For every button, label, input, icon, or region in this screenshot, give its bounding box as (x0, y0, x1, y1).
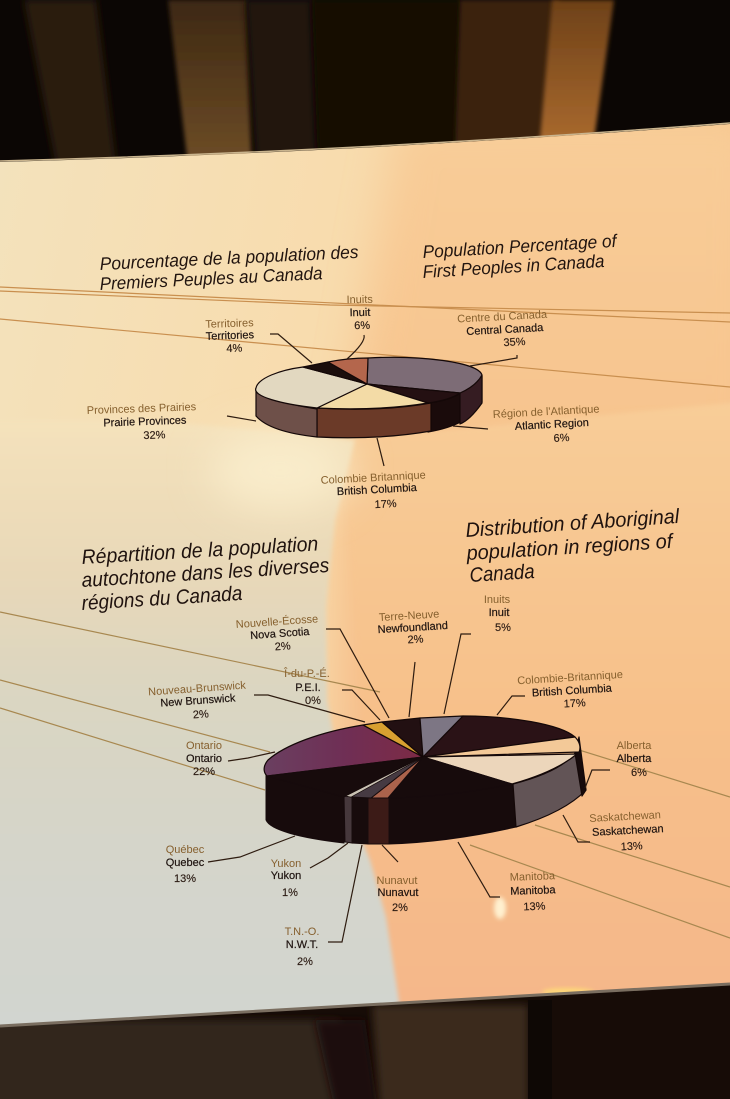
label: Territories: 4% (226, 343, 243, 355)
label: British Columbia: 17% (374, 498, 397, 511)
label: Atlantic Region: Région de l'Atlantique (493, 403, 600, 421)
label: Nunavut (377, 875, 418, 914)
label: Newfoundland (377, 608, 449, 648)
label: Yukon: Yukon (271, 870, 301, 882)
label: Inuit (346, 294, 374, 332)
label: Saskatchewan: 13% (620, 840, 643, 853)
title: English bottom: Distribution of Aboriginal (465, 505, 681, 542)
pie 1 side wall (256, 375, 482, 438)
label: P.E.I.: Î-du-P.-É. (283, 667, 330, 680)
title: French top (99, 242, 359, 294)
label: Central Canada: 35% (503, 336, 526, 349)
title: English top: First Peoples in Canada (422, 251, 605, 282)
wooden wall background (0, 0, 730, 200)
title: French top: Premiers Peuples au Canada (99, 263, 323, 294)
label: N.W.T.: N.W.T. (286, 939, 318, 951)
label: Prairie Provinces: Prairie Provinces (103, 415, 187, 429)
label: Nunavut: Nunavut (378, 887, 418, 899)
label: Yukon: Yukon (271, 858, 301, 870)
label: Nova Scotia: Nova Scotia (250, 626, 311, 642)
pie 2 side wall (266, 737, 586, 844)
label: Newfoundland: Newfoundland (377, 620, 448, 636)
label: British Columbia: 17% (563, 697, 586, 711)
label: Central Canada (457, 309, 550, 351)
label: Territories: Territories (206, 329, 255, 343)
label: Atlantic Region: 6% (553, 432, 570, 445)
label: Central Canada: Centre du Canada (457, 309, 548, 325)
pie 1 leader lines (227, 334, 517, 466)
title: English top: Population Percentage of (422, 231, 619, 262)
label: Alberta: 6% (631, 767, 647, 779)
label: Ontario: 22% (193, 766, 215, 778)
label: Quebec: 13% (174, 873, 196, 885)
pie chart: aboriginal population by region (264, 716, 586, 844)
floor below the board (0, 980, 730, 1099)
label: Inuit: Inuits (484, 594, 511, 606)
label: Alberta: Alberta (617, 753, 652, 765)
label: P.E.I.: P.E.I. (295, 682, 321, 694)
label: Inuit: Inuits (346, 294, 373, 306)
label: Territories: Territoires (205, 317, 254, 331)
label: British Columbia: Colombie Britannique (320, 469, 426, 487)
pie chart: first peoples (256, 357, 482, 438)
label: New Brunswick (148, 680, 249, 724)
label: Ontario: Ontario (186, 753, 222, 765)
warm light on right side of board (329, 124, 730, 856)
pie 1 top face (256, 357, 482, 409)
label: N.W.T.: 2% (297, 956, 313, 968)
label: Manitoba: Manitoba (510, 884, 557, 898)
label: Saskatchewan: Saskatchewan (589, 809, 661, 825)
label: Inuit: 5% (495, 622, 511, 634)
label: Atlantic Region: Atlantic Region (515, 417, 589, 433)
cool light on lower left of board (0, 420, 405, 1040)
label: N.W.T.: T.N.-O. (285, 926, 319, 938)
orange rule lines (0, 287, 730, 938)
label: Central Canada: Central Canada (466, 322, 545, 338)
label: Inuit (484, 594, 511, 634)
label: New Brunswick: Nouveau-Brunswick (148, 680, 247, 698)
label: British Columbia (517, 669, 625, 713)
pie 2 top face (264, 716, 580, 798)
label: Manitoba (510, 870, 557, 914)
label: Nunavut: Nunavut (377, 875, 417, 887)
label: Newfoundland: Terre-Neuve (379, 608, 440, 624)
title: French bottom (81, 532, 330, 615)
label: P.E.I. (283, 667, 330, 707)
label: Quebec (166, 844, 205, 885)
label: Prairie Provinces: 32% (143, 429, 166, 442)
label: Yukon (271, 858, 301, 899)
label: Nova Scotia (235, 612, 320, 656)
label: Inuit: 6% (354, 320, 370, 332)
label: Nunavut: 2% (392, 902, 408, 914)
title: English bottom: population in regions of (465, 530, 675, 565)
label: British Columbia: Colombie-Britannique (517, 669, 623, 687)
label: Ontario (186, 740, 222, 778)
title: French bottom: autochtone dans les diverses (81, 554, 330, 592)
pie 2 leader lines (208, 629, 610, 942)
label: N.W.T. (285, 926, 319, 968)
label: Nova Scotia: 2% (274, 640, 291, 653)
label: New Brunswick: 2% (192, 708, 209, 721)
label: Prairie Provinces (87, 401, 198, 444)
label: Nova Scotia: Nouvelle-Écosse (235, 612, 319, 631)
title: French bottom: régions du Canada (81, 582, 243, 615)
label: P.E.I.: 0% (305, 695, 321, 707)
board bottom edge (0, 984, 730, 1026)
title: English bottom: Canada (469, 560, 535, 587)
label: Inuit: Inuit (489, 607, 509, 619)
label: Quebec: Québec (166, 844, 205, 856)
label: Manitoba: 13% (523, 901, 546, 913)
label: Ontario: Ontario (186, 740, 222, 752)
title: English top (422, 231, 619, 282)
label: Prairie Provinces: Provinces des Prairies (87, 401, 197, 417)
label: Yukon: 1% (282, 887, 298, 899)
label: British Columbia: British Columbia (532, 683, 613, 699)
label: Quebec: Quebec (166, 857, 205, 869)
title: French top: Pourcentage de la population des (99, 242, 359, 274)
title: English bottom (465, 505, 681, 587)
label: Territories (205, 317, 255, 356)
label: Inuit: Inuit (349, 307, 370, 319)
label: Saskatchewan (589, 809, 665, 855)
label: Atlantic Region (493, 403, 601, 448)
label: British Columbia: British Columbia (337, 482, 418, 498)
board top edge (0, 123, 730, 161)
label: Newfoundland: 2% (407, 633, 424, 646)
label: Alberta (617, 740, 652, 779)
label: British Columbia (320, 469, 427, 514)
title: French bottom: Répartition de la population (81, 532, 319, 569)
label: Manitoba: Manitoba (510, 870, 556, 884)
label: Alberta: Alberta (617, 740, 652, 752)
label: Saskatchewan: Saskatchewan (592, 823, 664, 839)
label: New Brunswick: New Brunswick (160, 692, 236, 710)
